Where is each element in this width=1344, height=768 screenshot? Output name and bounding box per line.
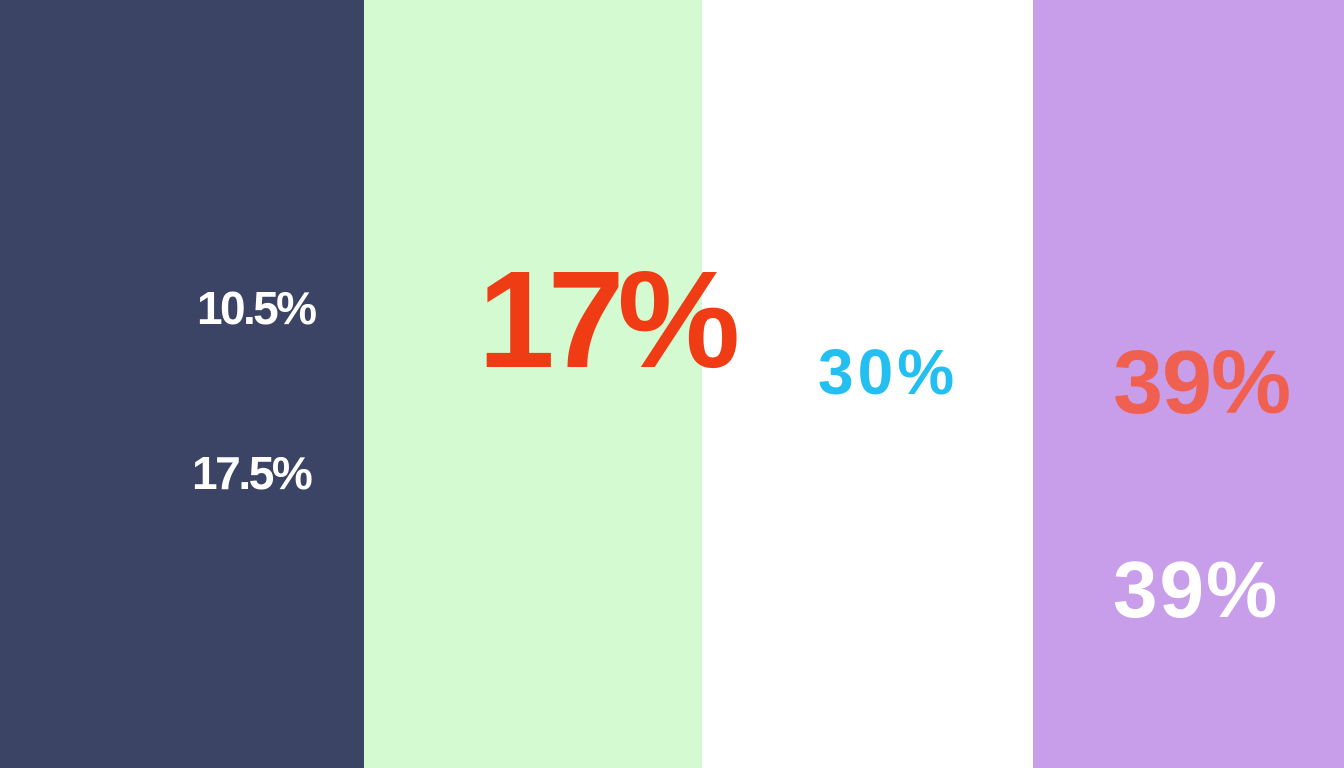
panel: green column	[364, 0, 702, 768]
panel: purple column	[1033, 0, 1344, 768]
stat: 39% coral: 39%	[1113, 333, 1290, 433]
stat: 17%: 17%	[478, 243, 733, 397]
stat: 39% white: 39%	[1113, 545, 1279, 634]
panel: navy column	[0, 0, 364, 768]
stat: 30%: 30%	[818, 336, 958, 408]
stat: 10.5%: 10.5%	[197, 282, 314, 334]
stat: 17.5%: 17.5%	[192, 447, 310, 499]
panel: white column	[702, 0, 1033, 768]
